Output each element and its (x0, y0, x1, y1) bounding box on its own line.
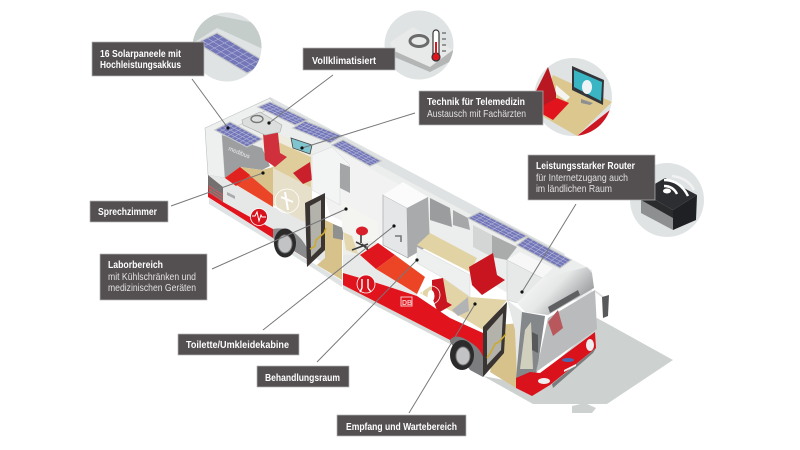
leader dots (226, 121, 524, 306)
device side (392, 50, 453, 72)
front red panel (516, 332, 596, 396)
box (303, 48, 395, 70)
heading: Technik für Telemedizin (427, 96, 525, 108)
front door (483, 302, 507, 377)
left lamp (538, 378, 550, 384)
toilet cabin front (383, 195, 408, 258)
lab floor (342, 228, 383, 255)
door shadow patch (333, 224, 343, 240)
desk surface (537, 75, 612, 136)
DB text: DB (402, 300, 412, 307)
heading: Leistungsstarker Router (536, 160, 635, 172)
treatment bed (360, 243, 425, 294)
text: Sprechzimmer (98, 206, 157, 218)
inset: solar panel (193, 12, 262, 82)
lab counter (342, 200, 378, 244)
text: Behandlungsraum (265, 372, 340, 384)
rail (487, 334, 506, 358)
panel 1 (215, 122, 262, 147)
glass (487, 313, 503, 365)
chair seat (543, 98, 569, 120)
label: router (528, 155, 655, 200)
wheel-side wall (209, 175, 342, 275)
monitor (572, 66, 604, 105)
bus cutaway illustration (205, 97, 609, 396)
monitor screen (574, 70, 602, 101)
stool base (352, 235, 368, 250)
leader lines (171, 75, 576, 413)
tail panel (227, 192, 235, 199)
router left face (641, 200, 673, 230)
number plate (564, 364, 576, 372)
router top (655, 178, 697, 210)
far wall (225, 98, 592, 300)
arm (595, 291, 603, 297)
arch (273, 228, 307, 259)
far roof edge (264, 97, 565, 262)
label: toilet (178, 334, 299, 355)
ground shadow (483, 318, 673, 404)
text: Empfang und Wartebereich (346, 421, 457, 433)
rear door (305, 193, 326, 267)
doctor (582, 80, 592, 94)
wheel arch (450, 336, 483, 377)
bumper (552, 348, 596, 388)
router right face (673, 195, 697, 230)
telemedicine leader (302, 113, 415, 148)
climate leader (269, 75, 333, 123)
white emblem (422, 286, 440, 304)
door handle (395, 236, 401, 242)
unit ring (251, 116, 263, 122)
rear room far wall (262, 125, 312, 205)
toilet leader (263, 226, 394, 330)
subheading: Hochleistungsakkus (100, 59, 181, 71)
tyre (274, 228, 296, 258)
label: solar (92, 42, 204, 76)
solar leader (192, 79, 228, 128)
door rail (310, 228, 326, 249)
box (92, 42, 204, 76)
box (337, 415, 466, 436)
thermometer bulb (432, 53, 440, 61)
counter top (417, 233, 477, 272)
body line 1: für Internetzugang auch (536, 172, 628, 184)
front cabinet (507, 252, 553, 305)
red band middle (343, 273, 483, 377)
right lamp (586, 339, 594, 351)
rear grille (208, 175, 223, 202)
text: Vollklimatisiert (312, 55, 376, 67)
solar panels (215, 102, 571, 268)
mirror left (532, 332, 538, 353)
family figures (360, 279, 371, 292)
heading: 16 Solarpaneele mit (100, 48, 181, 60)
door floor (317, 220, 342, 280)
bezel (641, 200, 673, 218)
label: telemedicine (419, 91, 543, 125)
glass (602, 295, 609, 318)
inset background (534, 58, 612, 136)
roof strip (193, 15, 262, 48)
chair double (469, 253, 505, 295)
desk (273, 142, 311, 190)
box (90, 201, 168, 222)
thermometer mercury (435, 42, 437, 55)
tyre (450, 340, 474, 370)
grille stripes (209, 186, 223, 201)
solar panel surface (199, 32, 260, 74)
rear wheel (273, 228, 307, 259)
panel 4 (332, 140, 381, 166)
hub (278, 235, 292, 253)
driver seat (548, 310, 563, 336)
panel 5 (468, 212, 527, 242)
wifi dot (663, 188, 671, 194)
lab beige (343, 232, 358, 254)
translucent partition (273, 168, 312, 224)
bed head (225, 167, 250, 186)
middle floor (420, 278, 507, 330)
label: lab (100, 254, 207, 300)
inset background (630, 163, 704, 237)
chair back (536, 67, 556, 106)
front wheel (450, 336, 483, 377)
rear bed (225, 167, 273, 207)
emblem figure (281, 192, 293, 210)
monitor stand (581, 99, 593, 105)
far window 2 (453, 210, 470, 230)
panel 6 (517, 237, 571, 268)
white wave logo (250, 208, 268, 226)
unit body (242, 112, 282, 135)
bed body (225, 167, 273, 207)
rear room gray wall (222, 135, 270, 178)
destination display (548, 290, 580, 313)
consulting leader (171, 173, 263, 206)
white gap (555, 85, 570, 101)
heartbeat (252, 212, 266, 221)
device ring (410, 36, 428, 46)
bed head (360, 243, 395, 269)
far wall grey 3 (473, 225, 492, 257)
monitor (291, 138, 312, 154)
toilet cabin side (407, 197, 430, 258)
front (507, 260, 542, 305)
chair treatment (432, 278, 452, 313)
box (257, 366, 349, 387)
label: climate (303, 48, 395, 70)
stool (352, 226, 368, 250)
air conditioner (242, 112, 282, 135)
inset: thermometer (384, 10, 454, 80)
rear frame (205, 98, 275, 178)
cabinet (312, 147, 350, 205)
front door floor (490, 323, 519, 388)
lab leader (212, 209, 346, 269)
side window (520, 322, 533, 369)
top (507, 252, 553, 278)
logo disc (250, 208, 268, 226)
thermometer ticks (442, 33, 446, 51)
cab roof (517, 267, 594, 315)
box (419, 91, 543, 125)
stool seat (356, 226, 368, 236)
door frame (305, 193, 325, 267)
middle wall (343, 255, 417, 296)
central cabin glass (312, 147, 400, 245)
heading: Laborbereich (108, 259, 163, 271)
router leader (522, 204, 576, 292)
label: consulting room (90, 201, 168, 222)
underside lip middle (343, 285, 450, 344)
small monitor (452, 297, 469, 316)
body line 2: medizinischen Geräten (108, 282, 196, 294)
chair rear room (263, 133, 287, 167)
DB plate (562, 358, 574, 362)
wifi outer arc (672, 176, 694, 190)
underside lip rear (209, 198, 342, 287)
panel 3 (293, 121, 342, 143)
mirror right (595, 291, 609, 318)
windscreen (536, 290, 597, 372)
body line 1: mit Kühlschränken und (108, 271, 196, 283)
device top (390, 27, 453, 67)
lower red chair (577, 110, 610, 136)
box (100, 254, 207, 300)
frame (483, 302, 507, 377)
text: Toilette/Umkleidekabine (186, 339, 289, 351)
front pillar (507, 300, 523, 377)
family emblem (357, 275, 375, 293)
red band rear (208, 184, 307, 259)
body: Austausch mit Fachärzten (427, 108, 526, 120)
wall lettering: medibus (227, 146, 251, 160)
far wall grey 4 (492, 235, 517, 260)
panel 2 (258, 102, 307, 125)
box (528, 155, 655, 200)
inset: router (630, 163, 704, 237)
thermometer tube (433, 30, 439, 57)
body line 2: im ländlichen Raum (536, 183, 612, 195)
inset background (196, 12, 262, 82)
toilet cabin top (383, 182, 428, 208)
far window 1 (430, 198, 452, 227)
reception leader (409, 304, 475, 413)
emblem person (428, 290, 434, 302)
treatment leader (317, 260, 417, 362)
rear room floor (240, 167, 273, 195)
hub (456, 347, 470, 365)
DB logo (401, 297, 412, 306)
counter white (417, 247, 470, 297)
door glass (310, 200, 321, 257)
small shadow fragment (572, 403, 596, 413)
cabinet dark side (340, 163, 350, 193)
label: reception (337, 415, 466, 436)
second chair (293, 162, 312, 184)
cab pillar grey (516, 312, 545, 379)
inset: telemedicine (534, 58, 612, 136)
inset background (384, 10, 454, 80)
wifi arcs (664, 180, 688, 196)
label: treatment room (257, 366, 349, 387)
medical emblem (275, 189, 299, 213)
box (178, 334, 299, 355)
bed body (376, 255, 425, 294)
